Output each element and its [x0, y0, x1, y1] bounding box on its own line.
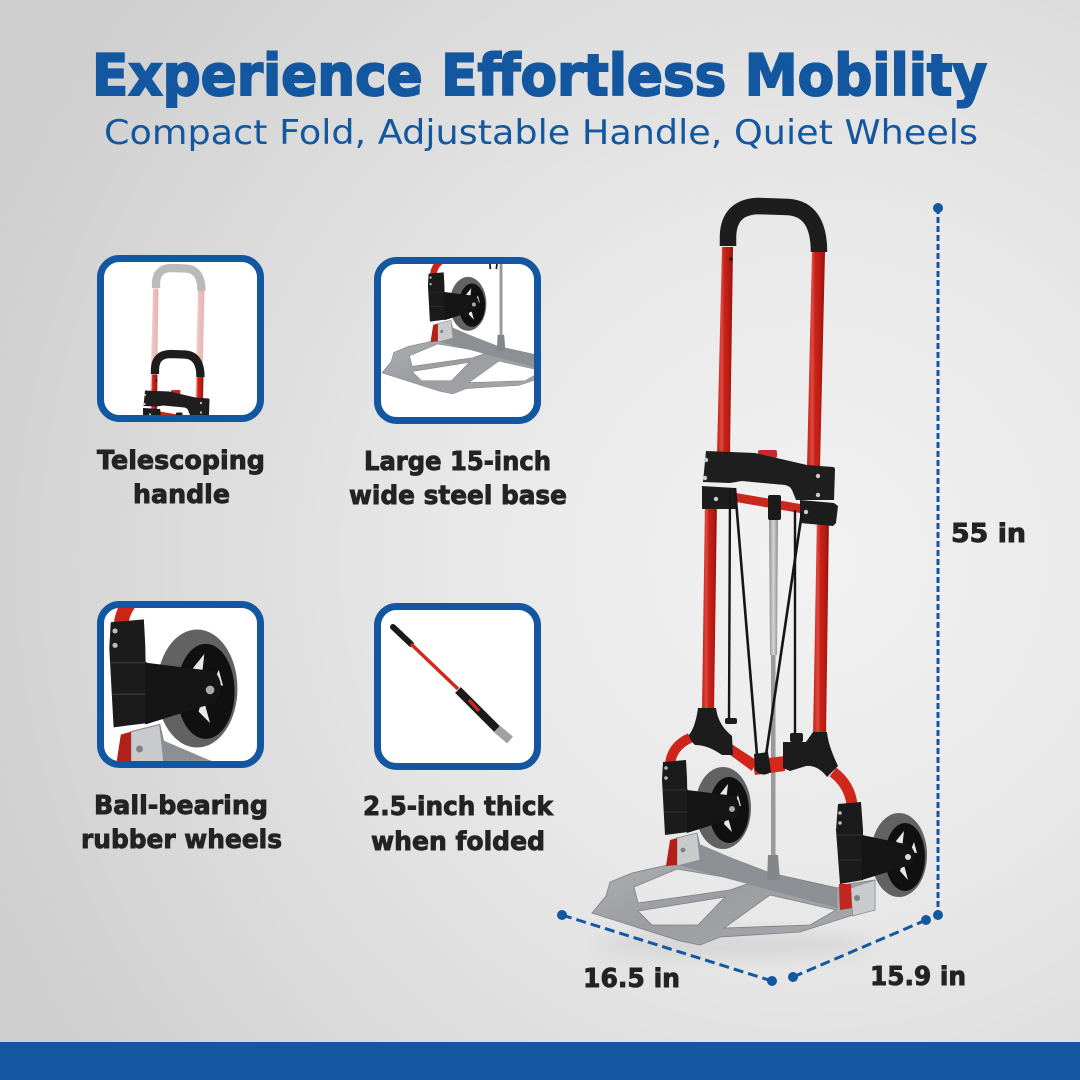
thumbnail: rubber wheels	[97, 601, 264, 768]
label: folded thickness	[363, 792, 554, 857]
dimension: width 16.5 in: 16.5 in	[583, 964, 680, 994]
thumbnail: telescoping handle	[97, 255, 264, 422]
title: Experience Effortless Mobility	[92, 43, 987, 109]
panel: folded thickness	[363, 606, 554, 857]
label: folded thickness: 2.5-inch thick	[363, 792, 554, 822]
label: steel base: wide steel base	[349, 481, 567, 511]
hand truck illustration	[592, 206, 927, 957]
label: telescoping handle: Telescoping	[97, 446, 265, 476]
thumbnail: folded trolley	[378, 606, 538, 766]
panel: rubber wheels	[82, 601, 282, 849]
dimension: depth 15.9 in: 15.9 in	[870, 962, 966, 992]
dimension: depth 15.9 in	[788, 915, 966, 992]
label: steel base	[349, 447, 567, 511]
label: rubber wheels	[81, 791, 282, 855]
label: telescoping handle: handle	[133, 480, 230, 510]
dimension: height 55 in: 55 in	[951, 519, 1026, 549]
dimension: height 55 in	[933, 203, 1026, 920]
label: rubber wheels: rubber wheels	[81, 825, 282, 855]
dimension: width 16.5 in	[557, 910, 777, 994]
subtitle: Compact Fold, Adjustable Handle, Quiet Wheels	[104, 113, 978, 153]
label: folded thickness: when folded	[371, 827, 545, 857]
panel: telescoping handle	[96, 255, 264, 504]
thumbnail: steel base	[374, 257, 541, 424]
label: telescoping handle	[97, 446, 265, 510]
panel: steel base	[349, 257, 566, 505]
label: steel base: Large 15-inch	[364, 447, 551, 477]
label: rubber wheels: Ball-bearing	[94, 791, 268, 821]
bottom band	[0, 1042, 1080, 1080]
